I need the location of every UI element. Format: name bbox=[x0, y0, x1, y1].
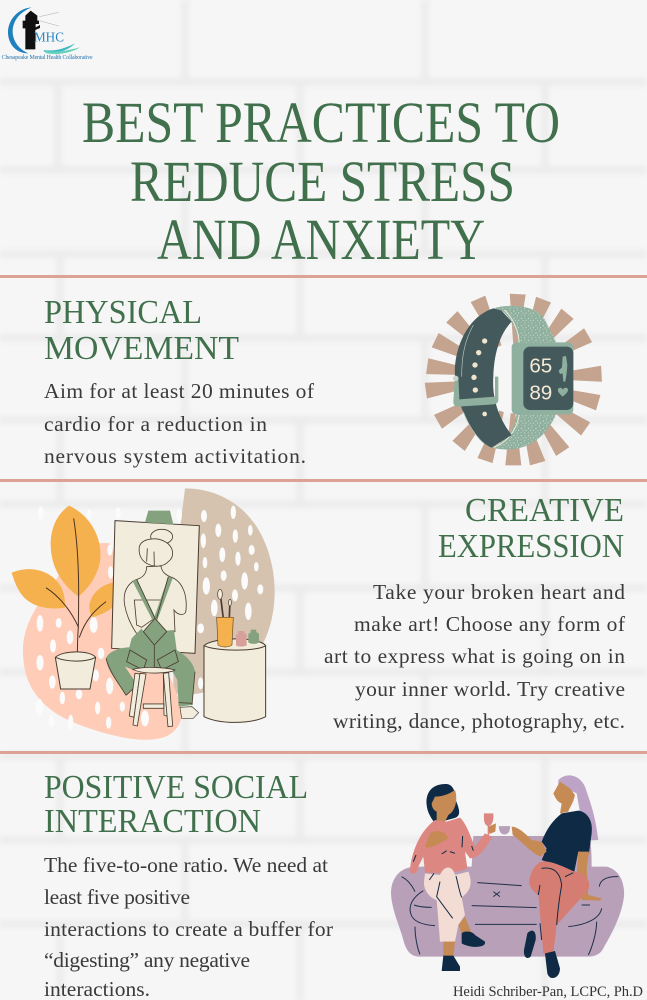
sofa bbox=[391, 836, 624, 957]
panel: positive social interaction text bbox=[44, 769, 333, 1000]
body: physical movement: cardio for a reduction in bbox=[44, 412, 267, 436]
icon: fitness watch with rays: 89 bbox=[529, 381, 552, 404]
sofa lines bbox=[402, 877, 618, 955]
buckle bbox=[453, 377, 498, 407]
speckled strap bbox=[493, 306, 557, 343]
foot bbox=[180, 707, 199, 718]
dark strap bbox=[455, 308, 512, 448]
body: physical movement bbox=[44, 379, 315, 468]
heart glyph bbox=[558, 388, 568, 397]
skin outline bbox=[124, 529, 186, 636]
body: positive social interaction: “digesting” any negative bbox=[44, 948, 250, 972]
icon: fitness watch with rays bbox=[425, 294, 602, 465]
heading: creative expression bbox=[438, 492, 624, 565]
plant leaves bbox=[12, 506, 113, 617]
woman left bbox=[410, 784, 492, 971]
panel: creative expression text bbox=[324, 492, 626, 733]
title bbox=[82, 90, 560, 272]
divider lines bbox=[0, 275, 647, 754]
pink blob bbox=[23, 543, 182, 740]
body: creative expression: make art! Choose any form of bbox=[354, 612, 626, 636]
body: physical movement: Aim for at least 20 minutes of bbox=[44, 379, 315, 403]
body: creative expression: Take your broken heart and bbox=[373, 580, 625, 604]
runner glyph bbox=[559, 356, 567, 382]
stool bbox=[129, 667, 175, 727]
heading: creative expression: CREATIVE bbox=[465, 492, 624, 529]
logo: Chesapeake Mental Health Collaborative: Chesapeake Mental Health Collaborative bbox=[2, 55, 93, 61]
heading: creative expression: EXPRESSION bbox=[438, 528, 624, 565]
body: creative expression: writing, dance, photography, etc. bbox=[333, 709, 625, 733]
side table bbox=[204, 639, 266, 722]
brushes bbox=[220, 592, 230, 618]
panel: physical movement text bbox=[44, 294, 315, 468]
heading: physical movement bbox=[44, 294, 239, 367]
body: physical movement: nervous system activitation. bbox=[44, 444, 306, 468]
easel canvas bbox=[112, 521, 199, 653]
body: creative expression: your inner world. Try creative bbox=[355, 677, 625, 701]
navy top bbox=[542, 811, 592, 872]
body: positive social interaction: interactions to create a buffer for bbox=[44, 917, 333, 941]
body: positive social interaction: least five positive bbox=[44, 885, 190, 909]
plant stems bbox=[46, 518, 106, 660]
body: positive social interaction bbox=[44, 853, 333, 1000]
title: AND ANXIETY bbox=[157, 207, 485, 272]
sun rays bbox=[425, 294, 602, 465]
title: BEST PRACTICES TO bbox=[82, 90, 560, 155]
illustration: artist painting at easel bbox=[12, 488, 275, 740]
arms bbox=[512, 827, 547, 857]
icon: fitness watch with rays: 65 bbox=[529, 355, 552, 378]
credit line: Heidi Schriber-Pan, LCPC, Ph.D bbox=[453, 984, 643, 1000]
woman figure bbox=[106, 529, 199, 727]
coral trousers bbox=[529, 861, 589, 953]
heading: positive social interaction bbox=[44, 769, 308, 840]
heading: physical movement: MOVEMENT bbox=[44, 330, 239, 367]
wine glass bbox=[484, 813, 493, 840]
heading: positive social interaction: POSITIVE SOCIAL bbox=[44, 769, 308, 806]
pink top bbox=[410, 818, 492, 874]
body: creative expression bbox=[324, 580, 626, 733]
body: creative expression: art to express what is going on in bbox=[324, 644, 625, 668]
shoes bbox=[462, 932, 485, 947]
heading: physical movement: PHYSICAL bbox=[44, 294, 202, 331]
green overalls bbox=[106, 577, 195, 707]
cup and paint jars bbox=[217, 617, 233, 647]
logo: Chesapeake Mental Health Collaborative bbox=[2, 7, 93, 61]
heading: positive social interaction: INTERACTION bbox=[44, 803, 261, 840]
logo: Chesapeake Mental Health Collaborative: MHC bbox=[34, 31, 64, 46]
woman right bbox=[512, 775, 602, 978]
hand and cup bbox=[488, 823, 496, 834]
cream trousers bbox=[424, 867, 471, 942]
title: REDUCE STRESS bbox=[130, 149, 515, 214]
plant pot bbox=[55, 652, 96, 689]
white dots bbox=[35, 506, 263, 730]
illustration: two women on a sofa bbox=[391, 775, 624, 978]
shoes bbox=[524, 931, 536, 958]
body: positive social interaction: The five-to-one ratio. We need at bbox=[44, 853, 328, 877]
watch face bbox=[512, 342, 573, 414]
beige blob bbox=[173, 488, 275, 694]
